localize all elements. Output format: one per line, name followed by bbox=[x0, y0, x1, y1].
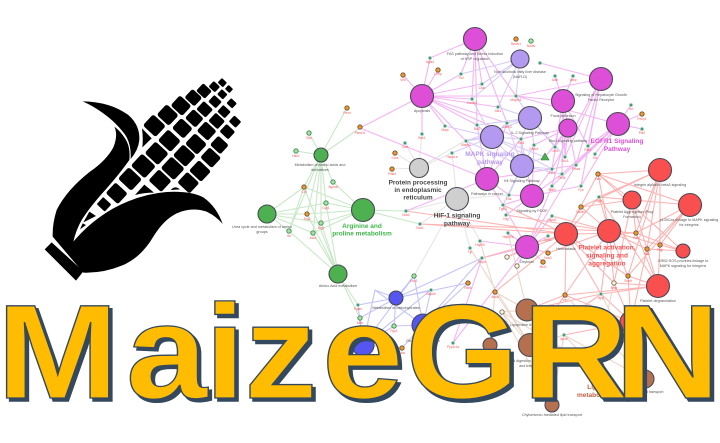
hub: Chylomicron lipid transport bbox=[522, 398, 582, 417]
hub: Scavenging bbox=[480, 338, 500, 358]
gene nodes: Nos1 bbox=[416, 226, 424, 230]
gene nodes: Capn1 bbox=[529, 147, 539, 151]
icon: corn cob bbox=[45, 78, 241, 281]
gene nodes: Nos3 bbox=[544, 256, 552, 260]
gene nodes: Hao1 bbox=[292, 154, 300, 158]
gene nodes: Ptk2 bbox=[639, 131, 645, 135]
hub: Platelet activation: aggregation bbox=[588, 260, 626, 268]
hub: EGFR1 signaling: Pathway bbox=[604, 146, 631, 153]
hub: Metabolism of amino acids: Metabolism of amino acids and bbox=[295, 163, 345, 167]
hub: Protein processing: in endoplasmic bbox=[394, 187, 442, 194]
gene nodes: Tgfb1 bbox=[499, 207, 507, 211]
hub: Amino acid metabolism: Amino Acid metabolism bbox=[319, 284, 357, 288]
hub: NAFLD bbox=[494, 50, 546, 79]
gene nodes: Aldo bbox=[399, 351, 405, 355]
hub: MAPK signaling: pathway bbox=[477, 159, 503, 166]
hub: Integrin signaling: Integrin alphaIIb beta3 signaling bbox=[634, 183, 686, 187]
hub: Signaling by PDGF: Signaling by PDGF bbox=[516, 209, 548, 213]
hub: FAS pathway bbox=[447, 28, 503, 61]
gene nodes: App bbox=[598, 296, 604, 300]
hub: Platelet degranulation: Platelet degranulation bbox=[640, 299, 676, 303]
hub: Hepatocyte growth factor bbox=[575, 68, 627, 102]
gene nodes: Hsp90b bbox=[502, 235, 514, 239]
hub: EGFR1 signaling bbox=[591, 112, 643, 153]
gene nodes: Sirpa bbox=[478, 260, 486, 264]
gene nodes: Pak1 bbox=[584, 148, 592, 152]
hub: Arginine and proline metabolism bbox=[332, 198, 392, 238]
gene nodes: Src bbox=[593, 156, 598, 160]
hub: Platelet activation: signaling and bbox=[586, 252, 628, 260]
hub: Hepatocyte growth factor: Signaling of Hepatocyte Growth bbox=[575, 93, 627, 97]
hub: Kit signaling: Kit Signaling Pathway bbox=[504, 179, 540, 183]
gene nodes: Hsp90 bbox=[475, 243, 485, 247]
gene nodes: Pemt bbox=[343, 111, 351, 115]
hub: IL-2 signaling bbox=[511, 106, 549, 135]
hub: Platelet aggregation: Formation) bbox=[623, 215, 641, 219]
hub: Lipid metabolism bbox=[577, 359, 613, 399]
gene nodes: Mapt bbox=[441, 128, 449, 132]
hub: Arginine and proline metabolism: Arginine and bbox=[342, 223, 382, 230]
gene nodes: Nrg bbox=[503, 217, 509, 221]
hub: Urea cycle: Urea cycle and metabolism of amino bbox=[232, 225, 292, 229]
gene nodes: Ilvl bbox=[287, 234, 291, 238]
hub: Signaling by PDGF bbox=[516, 184, 548, 213]
gene nodes: Calcrl1 bbox=[576, 210, 586, 214]
gene nodes: Calm3 bbox=[502, 125, 512, 129]
gene nodes: Camp2 bbox=[467, 101, 477, 105]
hub: Lipoprotein transport: Lipoprotein transport bbox=[510, 323, 544, 327]
hub: MAPK signaling: MAPK signaling bbox=[465, 151, 515, 158]
gene nodes: Sdk bbox=[644, 252, 650, 256]
hub: Arginine and proline metabolism: proline metabolism bbox=[332, 230, 392, 238]
hub: NAFLD: (NAFLD) bbox=[513, 75, 527, 79]
gene nodes: Vasp bbox=[569, 78, 577, 82]
hub: Lipoprotein transport bbox=[510, 299, 544, 327]
gene nodes: Mcl1 bbox=[540, 265, 547, 269]
hub: Lipid metabolism: metabolism bbox=[577, 392, 613, 399]
gene network chart bbox=[232, 28, 718, 417]
hub: Glucose metabolism: Glucose metabolism bbox=[406, 339, 440, 343]
hub: NAFLD: Non-alcoholic fatty liver disease bbox=[494, 70, 546, 74]
hub: Gluconeogenesis bbox=[340, 334, 394, 370]
gene nodes bbox=[287, 37, 663, 355]
gene nodes: Pgk1 bbox=[390, 329, 398, 333]
gene nodes: Ndufv1 bbox=[511, 42, 521, 46]
gene nodes: Stat3 bbox=[548, 188, 556, 192]
gene nodes: Casr bbox=[479, 86, 486, 90]
title: MaizeGRN: MaizeGRN bbox=[0, 280, 720, 430]
gene nodes: Agta1 bbox=[426, 60, 434, 64]
gene nodes: Bcl2 bbox=[474, 127, 480, 131]
gene nodes: Gapdh bbox=[426, 292, 436, 296]
gene nodes: Pipp bbox=[657, 248, 663, 252]
gene nodes: Agmat bbox=[328, 185, 338, 189]
gene nodes: Pdk bbox=[633, 236, 639, 240]
hub: Hepatocyte growth factor: Factor Receptor bbox=[588, 98, 615, 102]
corn husk leaves bbox=[45, 101, 223, 281]
gene nodes: Gars bbox=[392, 156, 399, 160]
gene nodes: Jak1 bbox=[549, 171, 556, 175]
gene nodes: Grb2 bbox=[551, 149, 559, 153]
hub: Protein processing bbox=[389, 158, 447, 202]
title: MaizeGRN: MaizeGRN bbox=[0, 277, 720, 427]
hub: Gluconeogenesis: Gluconeogenesis bbox=[340, 363, 394, 370]
hub: Metabolism of amino acids bbox=[295, 148, 345, 172]
network edges bbox=[267, 39, 690, 405]
hub: Urea cycle bbox=[232, 205, 292, 234]
hub: Oxytocin: Oxytocin bbox=[520, 260, 534, 264]
gene nodes: Cyp1 bbox=[322, 206, 330, 210]
hub: Glucose metabolism bbox=[406, 314, 440, 343]
hub: Focal adhesion bbox=[550, 90, 576, 118]
gene nodes: Pik3r bbox=[558, 176, 567, 180]
gene nodes: Ppp1r1a bbox=[447, 345, 459, 349]
gene nodes: Abca bbox=[491, 295, 499, 299]
gene nodes: Prkca bbox=[572, 167, 580, 171]
gene nodes: Pebp1 bbox=[637, 117, 647, 121]
gene nodes: Hspa1a bbox=[446, 155, 458, 159]
gene nodes: Vtn bbox=[563, 298, 568, 302]
hub: Platelet degranulation bbox=[640, 274, 676, 303]
gene nodes: Pgam bbox=[354, 307, 363, 311]
hub: Response to cytokine: Response to elevated bbox=[607, 335, 643, 339]
hub: Platelet aggregation: Platelet Aggregation (Plug bbox=[611, 210, 653, 214]
gene nodes: Bak1 bbox=[418, 136, 426, 140]
hub: p130Cas linkage bbox=[660, 194, 718, 227]
hub: GRB2 SOS linkage bbox=[658, 244, 708, 268]
hub nodes and labels bbox=[232, 28, 718, 417]
gene nodes: Gas bbox=[595, 177, 601, 181]
hub: Platelet activation: Platelet activation, bbox=[578, 244, 636, 252]
hub: Kit signaling bbox=[504, 154, 540, 183]
gene nodes: Nrk bbox=[507, 197, 512, 201]
gene nodes: Cars bbox=[402, 145, 409, 149]
hub: Response to cytokine bbox=[607, 311, 643, 344]
gene nodes: Shc1 bbox=[561, 159, 569, 163]
gene nodes: Eno1 bbox=[410, 279, 418, 283]
hub: Scavenging: Scavenging bbox=[480, 354, 500, 358]
hub: FAS pathway: of HSP regulation bbox=[461, 57, 489, 61]
corn kernels bbox=[80, 78, 241, 229]
hub: Pathways in cancer bbox=[471, 168, 504, 196]
hub: Urea cycle: groups bbox=[256, 230, 268, 234]
hub: Protein processing: reticulum bbox=[403, 194, 433, 202]
hub: p130Cas linkage: p130Cas linkage to MAPK signaling bbox=[660, 218, 718, 222]
hub: HDL lipid transport: HDL-mediated lipid transport bbox=[617, 390, 663, 394]
hub: Lipid digestion: Lipid digestion, mobilization bbox=[507, 359, 553, 363]
gene nodes: Ndufs bbox=[527, 44, 536, 48]
gene nodes: Ywl bbox=[458, 76, 464, 80]
gene nodes: Fyn bbox=[578, 188, 584, 192]
hub: Protein processing: Protein processing bbox=[389, 180, 447, 186]
gene nodes: Tjp bbox=[468, 250, 472, 254]
hub: HIF-1 signaling: pathway bbox=[444, 220, 470, 228]
gene nodes: Arg2 bbox=[304, 217, 311, 221]
hub: Chylomicron lipid transport: Chylomicron-mediated lipid transport bbox=[522, 413, 582, 417]
gene nodes: Vim bbox=[400, 78, 406, 82]
gene nodes: Lrrfip bbox=[434, 72, 442, 76]
hub: GRB2 SOS linkage: MAPK signaling for Integrins bbox=[660, 264, 706, 268]
hub: Oxytocin bbox=[516, 236, 538, 264]
hub: Amino acid metabolism bbox=[319, 265, 357, 288]
hub: EGFR1 signaling: EGFR1 Signaling bbox=[591, 138, 643, 145]
hub: Metabolism of carbohydrates: Metabolism of carbohydrates bbox=[372, 306, 420, 310]
hub: Lipid metabolism: Lipid bbox=[587, 384, 603, 391]
hub: HIF-1 signaling: HIF-1 signaling bbox=[434, 212, 480, 220]
hub: FAS pathway: FAS pathway and Stress induction bbox=[447, 52, 503, 56]
gene nodes: Pdia4 bbox=[388, 172, 396, 176]
gene nodes: Map2k1 bbox=[510, 98, 522, 102]
gene nodes: Itgb bbox=[596, 199, 602, 203]
hub: Lipid digestion bbox=[507, 334, 553, 368]
hub: Pathways in cancer: Pathways in cancer bbox=[471, 192, 504, 196]
hub: Focal adhesion: Focal adhesion bbox=[550, 114, 576, 118]
hub: HDL lipid transport bbox=[617, 370, 663, 394]
gene nodes: Hcl bbox=[629, 107, 634, 111]
gene nodes: Nos2 bbox=[402, 213, 410, 217]
hub: p130Cas linkage: for integrins bbox=[679, 223, 699, 227]
hub: Platelet aggregation bbox=[611, 191, 653, 219]
hub: Hemostasis: Hemostasis bbox=[556, 247, 576, 251]
gene nodes: Sds bbox=[306, 136, 312, 140]
gene nodes: Ass1 bbox=[309, 236, 317, 240]
gene nodes: Apoe bbox=[560, 337, 568, 341]
hub: Apoptosis: Apoptosis bbox=[414, 109, 430, 113]
gene nodes: Pank bbox=[464, 286, 472, 290]
hub: MAPK signaling bbox=[465, 126, 515, 166]
hub: Shc signaling: Shc1 signaling pathway bbox=[549, 139, 588, 143]
hub: Hemostasis bbox=[554, 222, 578, 251]
gene nodes: Pemt11 bbox=[355, 131, 366, 135]
gene nodes: Gpx1 bbox=[544, 238, 552, 242]
gene nodes: Raf1 bbox=[518, 141, 525, 145]
hub: Platelet activation bbox=[578, 220, 636, 268]
hub: Integrin signaling bbox=[634, 158, 686, 187]
gene nodes: Hspd1 bbox=[547, 218, 557, 222]
hub: Apoptosis bbox=[410, 84, 434, 113]
gene nodes: Arg1 bbox=[318, 226, 325, 230]
hub: Lipid digestion: and transport bbox=[519, 364, 541, 368]
gene nodes: Akt1 bbox=[495, 109, 501, 113]
hub: Shc signaling bbox=[549, 119, 588, 143]
gene nodes: Bmp bbox=[611, 286, 618, 290]
hub: HIF-1 signaling bbox=[434, 188, 480, 228]
hub: Metabolism of amino acids: derivatives bbox=[311, 168, 329, 172]
hub: Response to cytokine: cytosolic Ca2+ bbox=[613, 340, 637, 344]
gene nodes: Cth bbox=[302, 190, 307, 194]
hub: IL-2 signaling: IL-2 Signaling Pathway bbox=[511, 131, 549, 135]
gene nodes: Scarf bbox=[624, 279, 632, 283]
gene nodes: Actb bbox=[552, 78, 558, 82]
hub: GRB2 SOS linkage: GRB2:SOS provides linkage to bbox=[658, 259, 708, 263]
gene nodes: Mapk1 bbox=[461, 143, 471, 147]
hub: Metabolism of carbohydrates bbox=[372, 291, 420, 310]
gene nodes: Mdh bbox=[357, 321, 363, 325]
